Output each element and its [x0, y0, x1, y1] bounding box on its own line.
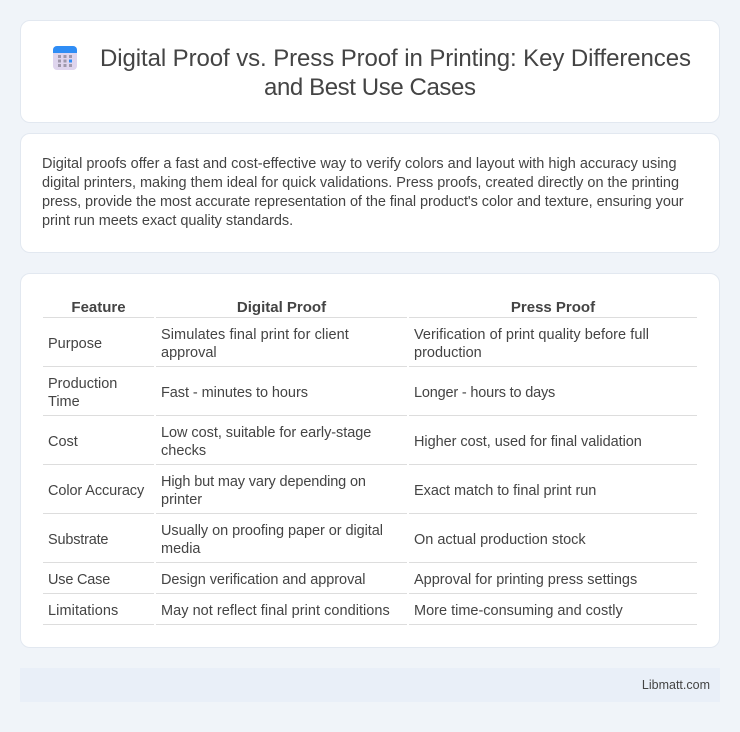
footer brand: Libmatt.com [642, 678, 710, 692]
comparison table: Cost [48, 434, 78, 450]
summary text: print run meets exact quality standards. [42, 213, 293, 229]
comparison table: Purpose [48, 336, 102, 352]
comparison table: Longer - hours to days [414, 385, 555, 401]
comparison table: Approval for printing press settings [414, 572, 637, 588]
comparison table: Substrate [48, 532, 108, 548]
comparison table: production [414, 345, 482, 361]
summary text: press, provide the most accurate representation of the final product's color and texture, ensuring your [42, 194, 684, 210]
comparison table: media [161, 541, 200, 557]
icon: calendar grid [53, 46, 77, 70]
title [100, 45, 691, 101]
summary text [42, 156, 684, 229]
comparison table: Exact match to final print run [414, 483, 596, 499]
comparison table: Time [48, 394, 80, 410]
summary card [20, 133, 720, 253]
table header: Press Proof [511, 299, 595, 316]
comparison table: Usually on proofing paper or digital [161, 523, 383, 539]
comparison table: High but may vary depending on [161, 474, 366, 490]
comparison table [43, 299, 697, 625]
title: Digital Proof vs. Press Proof in Printing: Key Differences [100, 45, 691, 72]
comparison table: approval [161, 345, 217, 361]
comparison table: Production [48, 376, 117, 392]
comparison table: Use Case [48, 572, 110, 588]
comparison table: May not reflect final print conditions [161, 603, 390, 619]
summary text: digital printers, making them ideal for quick validations. Press proofs, created directly on the printing [42, 175, 679, 191]
comparison table: Higher cost, used for final validation [414, 434, 642, 450]
header card [20, 20, 720, 123]
title: and Best Use Cases [264, 74, 476, 101]
comparison table: More time-consuming and costly [414, 603, 623, 619]
table header [71, 299, 596, 316]
comparison table: Limitations [48, 603, 118, 619]
table header: Digital Proof [237, 299, 326, 316]
comparison table card [20, 273, 720, 648]
summary text: Digital proofs offer a fast and cost-effective way to verify colors and layout with high accuracy using [42, 156, 677, 172]
comparison table: Verification of print quality before full [414, 327, 649, 343]
footer bar [20, 668, 720, 702]
comparison table: printer [161, 492, 202, 508]
comparison table: Fast - minutes to hours [161, 385, 308, 401]
comparison table: On actual production stock [414, 532, 586, 548]
comparison table: Design verification and approval [161, 572, 365, 588]
table header: Feature [71, 299, 126, 316]
comparison table: checks [161, 443, 206, 459]
comparison table: Simulates final print for client [161, 327, 349, 343]
comparison table: Low cost, suitable for early-stage [161, 425, 371, 441]
comparison table: Color Accuracy [48, 483, 144, 499]
